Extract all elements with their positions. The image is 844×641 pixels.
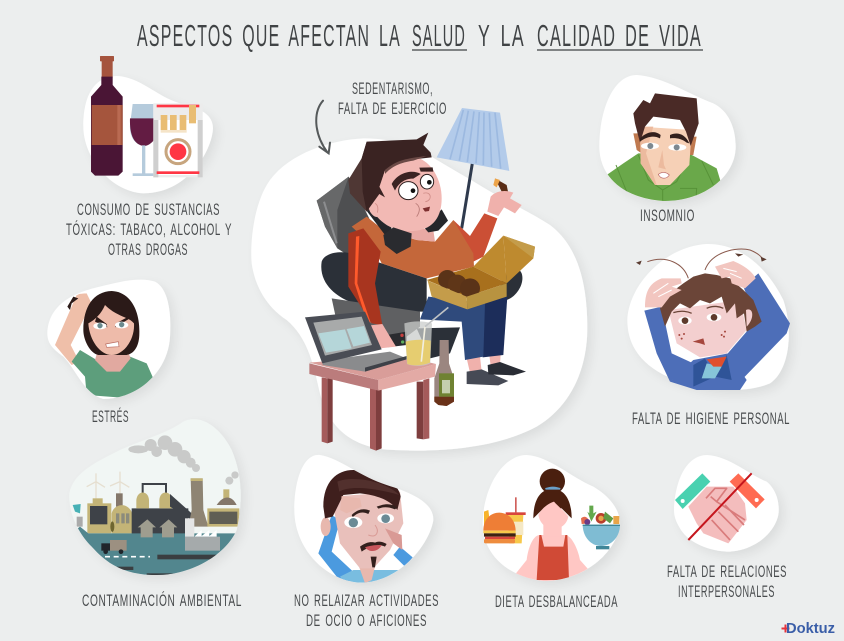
man (318, 470, 413, 587)
logo: Doktuz: Doktuz (786, 620, 835, 637)
legs (420, 297, 526, 385)
donut box (427, 236, 535, 309)
illustration: woman with burger and salad (483, 455, 620, 582)
panel: ocio (294, 455, 439, 630)
label: ocio: NO RELAIZAR ACTIVIDADES (294, 591, 439, 610)
panel: estrés (47, 280, 170, 426)
blob (251, 138, 587, 451)
illustration: tired man (599, 75, 736, 203)
label: contaminación: CONTAMINACIÓN AMBIENTAL (82, 591, 242, 610)
title: SALUD (412, 18, 466, 53)
man (607, 93, 722, 203)
panel: insomnio (599, 75, 736, 225)
panel: relaciones (667, 455, 787, 601)
blob (599, 75, 736, 201)
label: ocio (294, 591, 439, 630)
panel: falta de higiene (627, 244, 790, 428)
blob (69, 419, 241, 575)
blob (627, 244, 789, 390)
cigarette pack (153, 103, 203, 177)
illustration: man with hands on face (294, 455, 433, 587)
burger and drink (483, 497, 526, 543)
label: consumo: OTRAS DROGAS (108, 240, 188, 259)
title: ASPECTOS QUE AFECTAN LA (137, 18, 401, 53)
blob (674, 455, 779, 552)
table (309, 359, 436, 451)
wine bottle (91, 56, 123, 176)
armchair (317, 177, 522, 358)
woman (516, 468, 588, 581)
blob (483, 455, 620, 581)
label: sedentarismo (338, 79, 447, 118)
scene (69, 435, 239, 577)
woman (55, 291, 154, 398)
illustration: factory scene (69, 419, 241, 577)
label: consumo (66, 200, 232, 259)
torso and arms (348, 213, 497, 348)
illustration: sedentary man (251, 101, 587, 451)
panel: sedentarismo (251, 79, 587, 451)
handshake (675, 473, 765, 543)
illustration: bottle, wine glass and cigarettes (83, 56, 213, 193)
label: ocio: DE OCIO O AFICIONES (306, 611, 427, 630)
panel: dieta (483, 455, 620, 611)
label: sedentarismo: FALTA DE EJERCICIO (338, 99, 447, 118)
panel: consumo de sustancias (66, 56, 232, 259)
arrow (316, 101, 330, 153)
label: dieta: DIETA DESBALANCEADA (495, 592, 618, 611)
head (348, 133, 448, 254)
salad (581, 506, 620, 549)
donut hand (487, 178, 522, 216)
blob (294, 455, 433, 583)
illustration: stressed woman (47, 280, 170, 399)
laptop (305, 312, 407, 372)
panel: estrés: ESTRÉS (92, 407, 129, 426)
panel: contaminación ambiental (72, 436, 245, 606)
label: consumo: CONSUMO DE SUSTANCIAS (77, 200, 220, 219)
label: insomnio: INSOMNIO (640, 206, 695, 225)
lamp (437, 108, 509, 228)
label: sedentarismo: SEDENTARISMO, (352, 79, 433, 98)
blob (83, 76, 213, 193)
illustration: crossed handshake (674, 455, 779, 552)
boy (636, 249, 790, 390)
label: relaciones (667, 562, 787, 601)
wine glass (130, 104, 155, 176)
glass (404, 307, 448, 366)
illustration: scratching boy (627, 244, 790, 390)
title: Y LA (478, 18, 525, 53)
label: consumo: TÓXICAS: TABACO, ALCOHOL Y (66, 220, 232, 239)
bottle (434, 340, 454, 406)
blob (47, 280, 170, 399)
